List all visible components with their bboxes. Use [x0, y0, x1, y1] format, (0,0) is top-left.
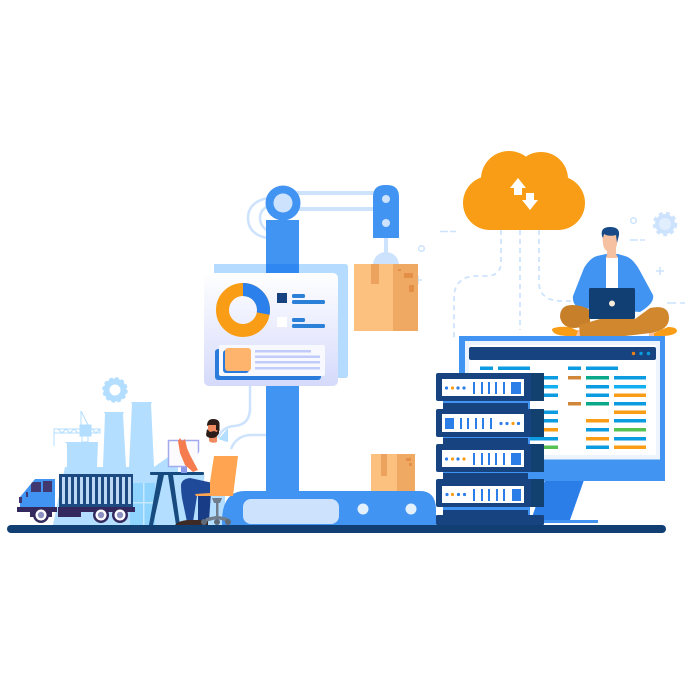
connector lines: [218, 198, 268, 449]
crane: [54, 411, 100, 446]
decorative dashes and gear: [440, 218, 685, 303]
front leg: [579, 307, 669, 336]
data table: [480, 366, 646, 449]
arm column: [266, 220, 299, 491]
server unit 2: [436, 409, 544, 437]
arm joint: [266, 186, 300, 220]
cloud: [463, 151, 585, 230]
small decorations near box: [414, 246, 424, 284]
feet: [575, 330, 580, 336]
truck cab: [19, 479, 55, 508]
icon: upload arrow: [510, 178, 526, 195]
arm: [178, 438, 198, 472]
shoes: [552, 327, 578, 336]
person at desk: [175, 419, 231, 525]
icon: download arrow: [522, 193, 538, 210]
head: [206, 419, 220, 443]
dashed connectors: [454, 230, 592, 338]
server unit 3: [436, 444, 544, 472]
truck container: [59, 474, 133, 507]
info card: [215, 345, 325, 380]
icon: factory gear: [104, 378, 126, 402]
chair: [195, 456, 238, 525]
server rack: [436, 373, 544, 525]
donut chart: [222, 283, 270, 330]
monitor stand: [530, 480, 598, 523]
robotic arm: [266, 185, 399, 491]
truck: [17, 474, 135, 523]
server unit 4: [436, 479, 544, 507]
front leg: [181, 478, 213, 522]
server unit 1: [436, 373, 544, 401]
panel: dashboard: [204, 264, 348, 386]
package on conveyor: [371, 454, 415, 491]
truck chassis and wheels: [17, 507, 135, 523]
back leg: [560, 305, 590, 328]
shirt: [606, 257, 618, 291]
icon: gear: [654, 213, 676, 235]
ground bar: [7, 525, 666, 533]
window header: [469, 347, 656, 360]
torso: [193, 439, 231, 492]
laptop: [589, 288, 635, 319]
monitor: [459, 336, 665, 523]
person with laptop: [552, 227, 677, 336]
arm rods: [295, 191, 375, 211]
gripper: [373, 185, 399, 265]
factory silhouette: [53, 402, 228, 525]
conveyor base: [222, 491, 436, 525]
jacket: [573, 254, 653, 312]
second leg: [198, 492, 211, 521]
package held by arm: [354, 264, 418, 331]
neck and head: [602, 227, 619, 258]
book on desk: [168, 440, 198, 473]
shoes: [175, 520, 208, 525]
desk: [149, 472, 204, 525]
legend: [277, 293, 325, 328]
